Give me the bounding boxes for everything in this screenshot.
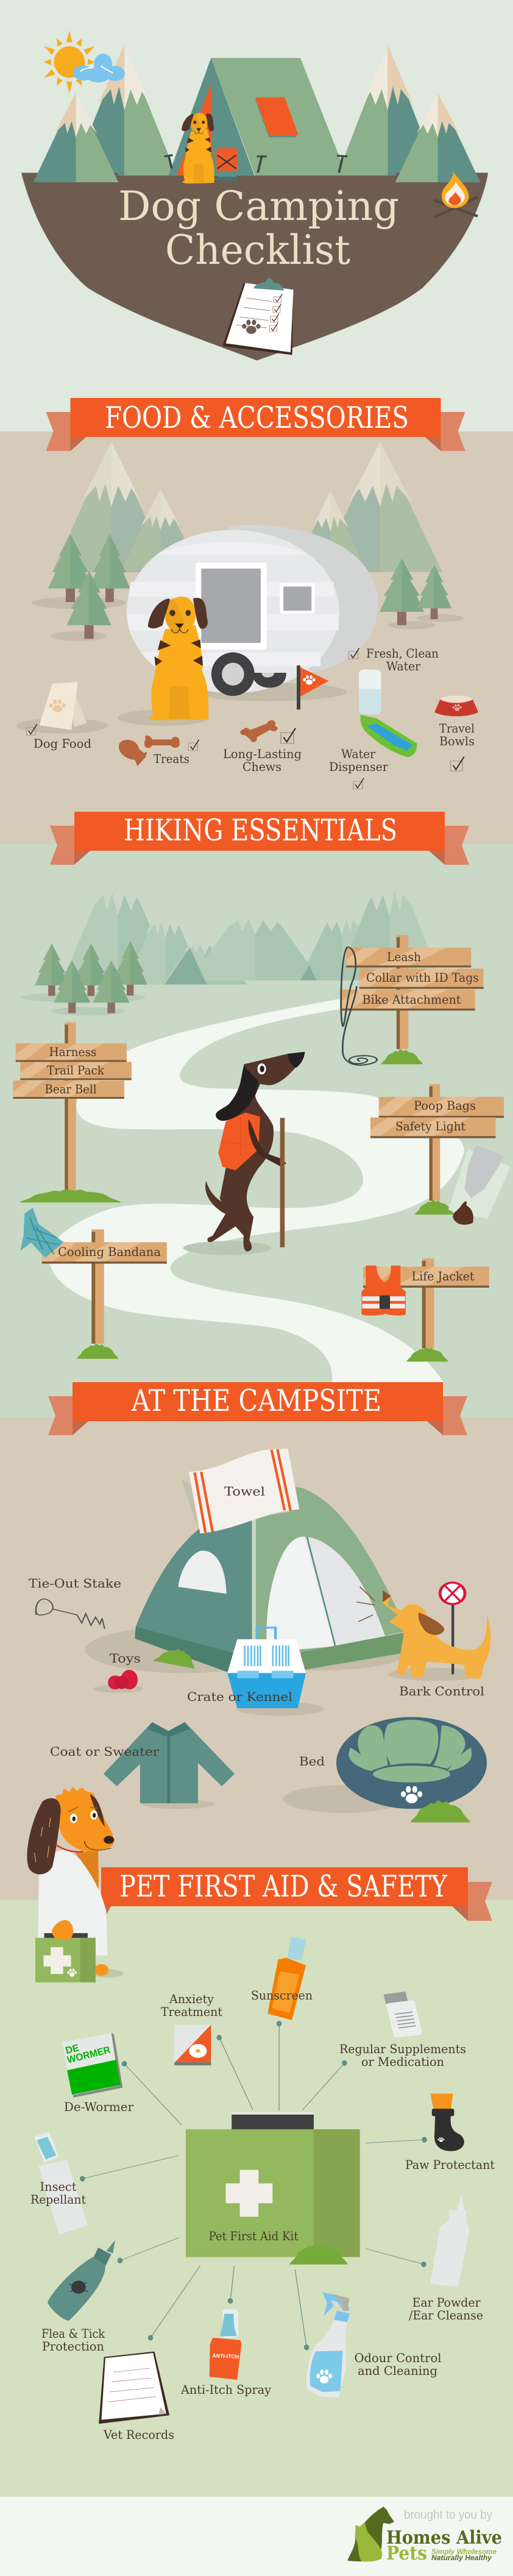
icon: bandana — [20, 1208, 64, 1258]
tent shadow — [85, 1627, 281, 1673]
campsite item labels: Towel — [224, 1484, 265, 1499]
first aid item labels: De-Wormer — [64, 2099, 133, 2114]
icon: towel — [182, 1449, 299, 1534]
icon: sitting dog — [182, 113, 214, 183]
panel: hiking essentials — [13, 851, 511, 1382]
panel: food and accessories — [16, 442, 478, 789]
icon: poop bag — [448, 1144, 511, 1225]
first aid item labels: Insect — [40, 2179, 77, 2194]
icon: dog bed — [283, 1717, 487, 1822]
hiking item labels: Trail Pack — [47, 1063, 105, 1077]
food item labels — [34, 646, 475, 774]
icon: insect repellant — [34, 2132, 88, 2235]
campsite item labels: Toys — [110, 1651, 141, 1666]
banner heading: at the campsite — [48, 1382, 467, 1435]
hiking item labels: Collar with ID Tags — [366, 970, 479, 985]
background mountains — [52, 442, 442, 572]
first aid item labels — [30, 1988, 495, 2442]
food item labels: Travel — [439, 721, 475, 736]
campsite item labels: Bark Control — [399, 1684, 484, 1698]
icon: sun — [43, 30, 96, 94]
footer credit: brought to you by — [404, 2508, 492, 2522]
campsite item labels: Coat or Sweater — [50, 1744, 159, 1759]
icon: supplement bottle — [383, 1991, 423, 2038]
title: Checklist — [165, 227, 350, 274]
footer credit: Pets — [386, 2542, 427, 2564]
icon: large mountains — [72, 45, 439, 176]
hiking item labels: Bike Attachment — [362, 992, 461, 1007]
banner heading: hiking essentials: HIKING ESSENTIALS — [124, 813, 397, 848]
icon: A-frame tent — [165, 58, 347, 176]
campsite item labels: Tie-Out Stake — [29, 1576, 121, 1591]
icon: water dispenser — [359, 670, 417, 757]
food item labels: Treats — [154, 751, 189, 766]
panel: hero header — [21, 30, 488, 360]
first aid item labels: Pet First Aid Kit — [209, 2229, 299, 2243]
first aid item labels: Regular Supplements — [339, 2042, 466, 2056]
icon: anti-itch spray — [210, 2309, 241, 2380]
first aid item labels: Odour Control — [355, 2351, 441, 2365]
icon: paw flag — [297, 665, 329, 709]
icon: first aid kit — [186, 2112, 360, 2265]
faded mountains — [62, 851, 442, 984]
winding trail — [49, 999, 464, 1382]
icon: vet records — [99, 2352, 169, 2424]
campsite item labels: Crate or Kennel — [187, 1689, 292, 1704]
icon: sitting dog — [118, 597, 210, 726]
icon: homes alive logo — [347, 2507, 394, 2561]
banner heading: pet first aid — [101, 1867, 492, 1921]
panel: at the campsite — [29, 1449, 490, 1822]
icon: de-wormer box — [62, 2033, 122, 2098]
icon: anxiety treatment box — [174, 2024, 211, 2065]
first aid item labels: /Ear Cleanse — [409, 2308, 483, 2322]
icon: crate — [227, 1628, 324, 1716]
food item labels: Chews — [242, 759, 281, 774]
hiking item labels: Life Jacket — [412, 1269, 474, 1283]
title — [118, 183, 399, 274]
food item labels: Dispenser — [329, 759, 388, 774]
icon: dog food bag — [16, 682, 108, 734]
icon: dome tent — [135, 1487, 408, 1673]
panel: pet first aid and safety — [27, 1787, 495, 2561]
food item labels: Fresh, Clean — [366, 646, 439, 661]
signpost: leash, collar, bike — [340, 935, 484, 1064]
signpost: cooling bandana — [42, 1229, 167, 1359]
hiking item labels: Poop Bags — [414, 1098, 476, 1113]
banner heading: pet first aid: PET FIRST AID & SAFETY — [119, 1869, 448, 1904]
footer credit: Simply Wholesome — [431, 2547, 497, 2556]
first aid item labels: Anxiety — [169, 1992, 214, 2006]
hiking item labels: Harness — [49, 1045, 96, 1059]
campsite item labels — [29, 1484, 484, 1769]
checkboxes — [26, 648, 464, 789]
first aid item labels: or Medication — [361, 2054, 444, 2069]
icon: lantern — [215, 136, 238, 180]
hiking item labels: Bear Bell — [45, 1082, 96, 1096]
icon: de-wormer box: WORMER — [66, 2044, 111, 2065]
banner heading: food and accessories: FOOD & ACCESSORIES — [105, 400, 409, 435]
food item labels: Long-Lasting — [223, 747, 302, 761]
title: Dog Camping — [118, 183, 399, 230]
icon: flea and tick spray — [48, 2240, 115, 2321]
first aid item labels: Repellant — [30, 2192, 86, 2207]
icon: kit shadow and paw — [92, 1964, 124, 1978]
signpost: life jacket — [363, 1258, 489, 1361]
icon: clipboard with checklist — [222, 278, 294, 355]
first aid item labels: Protection — [42, 2339, 104, 2354]
footer credit: Homes Alive — [386, 2527, 502, 2549]
tree group — [31, 534, 464, 641]
campsite item labels: Bed — [299, 1754, 325, 1769]
signpost: poop bags, safety light — [370, 1084, 504, 1215]
icon: treats — [119, 736, 180, 766]
hiking item labels: Safety Light — [395, 1119, 465, 1134]
icon: travel bowl — [434, 695, 478, 716]
icon: coat — [104, 1722, 235, 1809]
banner heading: at the campsite: AT THE CAMPSITE — [131, 1383, 381, 1418]
first aid item labels: Flea & Tick — [41, 2326, 105, 2341]
icon: campfire — [434, 171, 478, 217]
first aid item labels: and Cleaning — [358, 2363, 437, 2378]
signpost: harness, trail pack, bear bell — [13, 1022, 132, 1202]
icon: tie-out stake — [36, 1599, 105, 1629]
icon: caravan — [127, 525, 378, 701]
first aid item labels: Sunscreen — [251, 1988, 313, 2003]
banner heading: food and accessories — [46, 398, 465, 451]
first aid item labels: Ear Powder — [412, 2295, 481, 2310]
footer credit — [386, 2508, 502, 2564]
first aid item labels: Paw Protectant — [405, 2157, 495, 2172]
icon: paw protectant — [430, 2093, 464, 2151]
ground island — [21, 172, 488, 360]
icon: toy — [94, 1670, 143, 1693]
banner heading: hiking essentials — [50, 812, 469, 865]
first aid item labels: Anti-Itch Spray — [180, 2382, 272, 2397]
food item labels: Bowls — [439, 734, 475, 748]
icon: long lasting chew — [240, 720, 278, 742]
icon: anti-itch spray: ANTI-ITCH — [212, 2353, 239, 2360]
icon: de-wormer box: DE — [65, 2042, 80, 2056]
food item labels: Water — [341, 747, 375, 761]
icon: barking dog and sign — [356, 1583, 490, 1681]
icon: cloud — [73, 54, 125, 82]
icon: vet dog — [27, 1787, 114, 1982]
food item labels: Water — [386, 659, 420, 673]
icon: grass tuft — [154, 1645, 200, 1669]
icon: leash — [341, 947, 377, 1065]
food item labels: Dog Food — [34, 736, 91, 751]
hiking item labels: Cooling Bandana — [58, 1244, 161, 1259]
tree group — [21, 941, 147, 1015]
icon: small mountains — [34, 93, 480, 182]
first aid item labels: Treatment — [161, 2004, 222, 2019]
hiking item labels: Leash — [387, 949, 421, 964]
icon: life jacket — [361, 1266, 406, 1316]
connector lines — [80, 2021, 427, 2350]
first aid item labels: Vet Records — [103, 2427, 174, 2442]
footer credit: Naturally Healthy — [431, 2553, 492, 2562]
icon: hiking dog — [183, 1052, 305, 1255]
icon: sunscreen — [267, 1937, 306, 2020]
icon: odour spray — [306, 2293, 350, 2398]
icon: ear powder — [430, 2195, 470, 2287]
hiking item labels — [45, 949, 479, 1283]
